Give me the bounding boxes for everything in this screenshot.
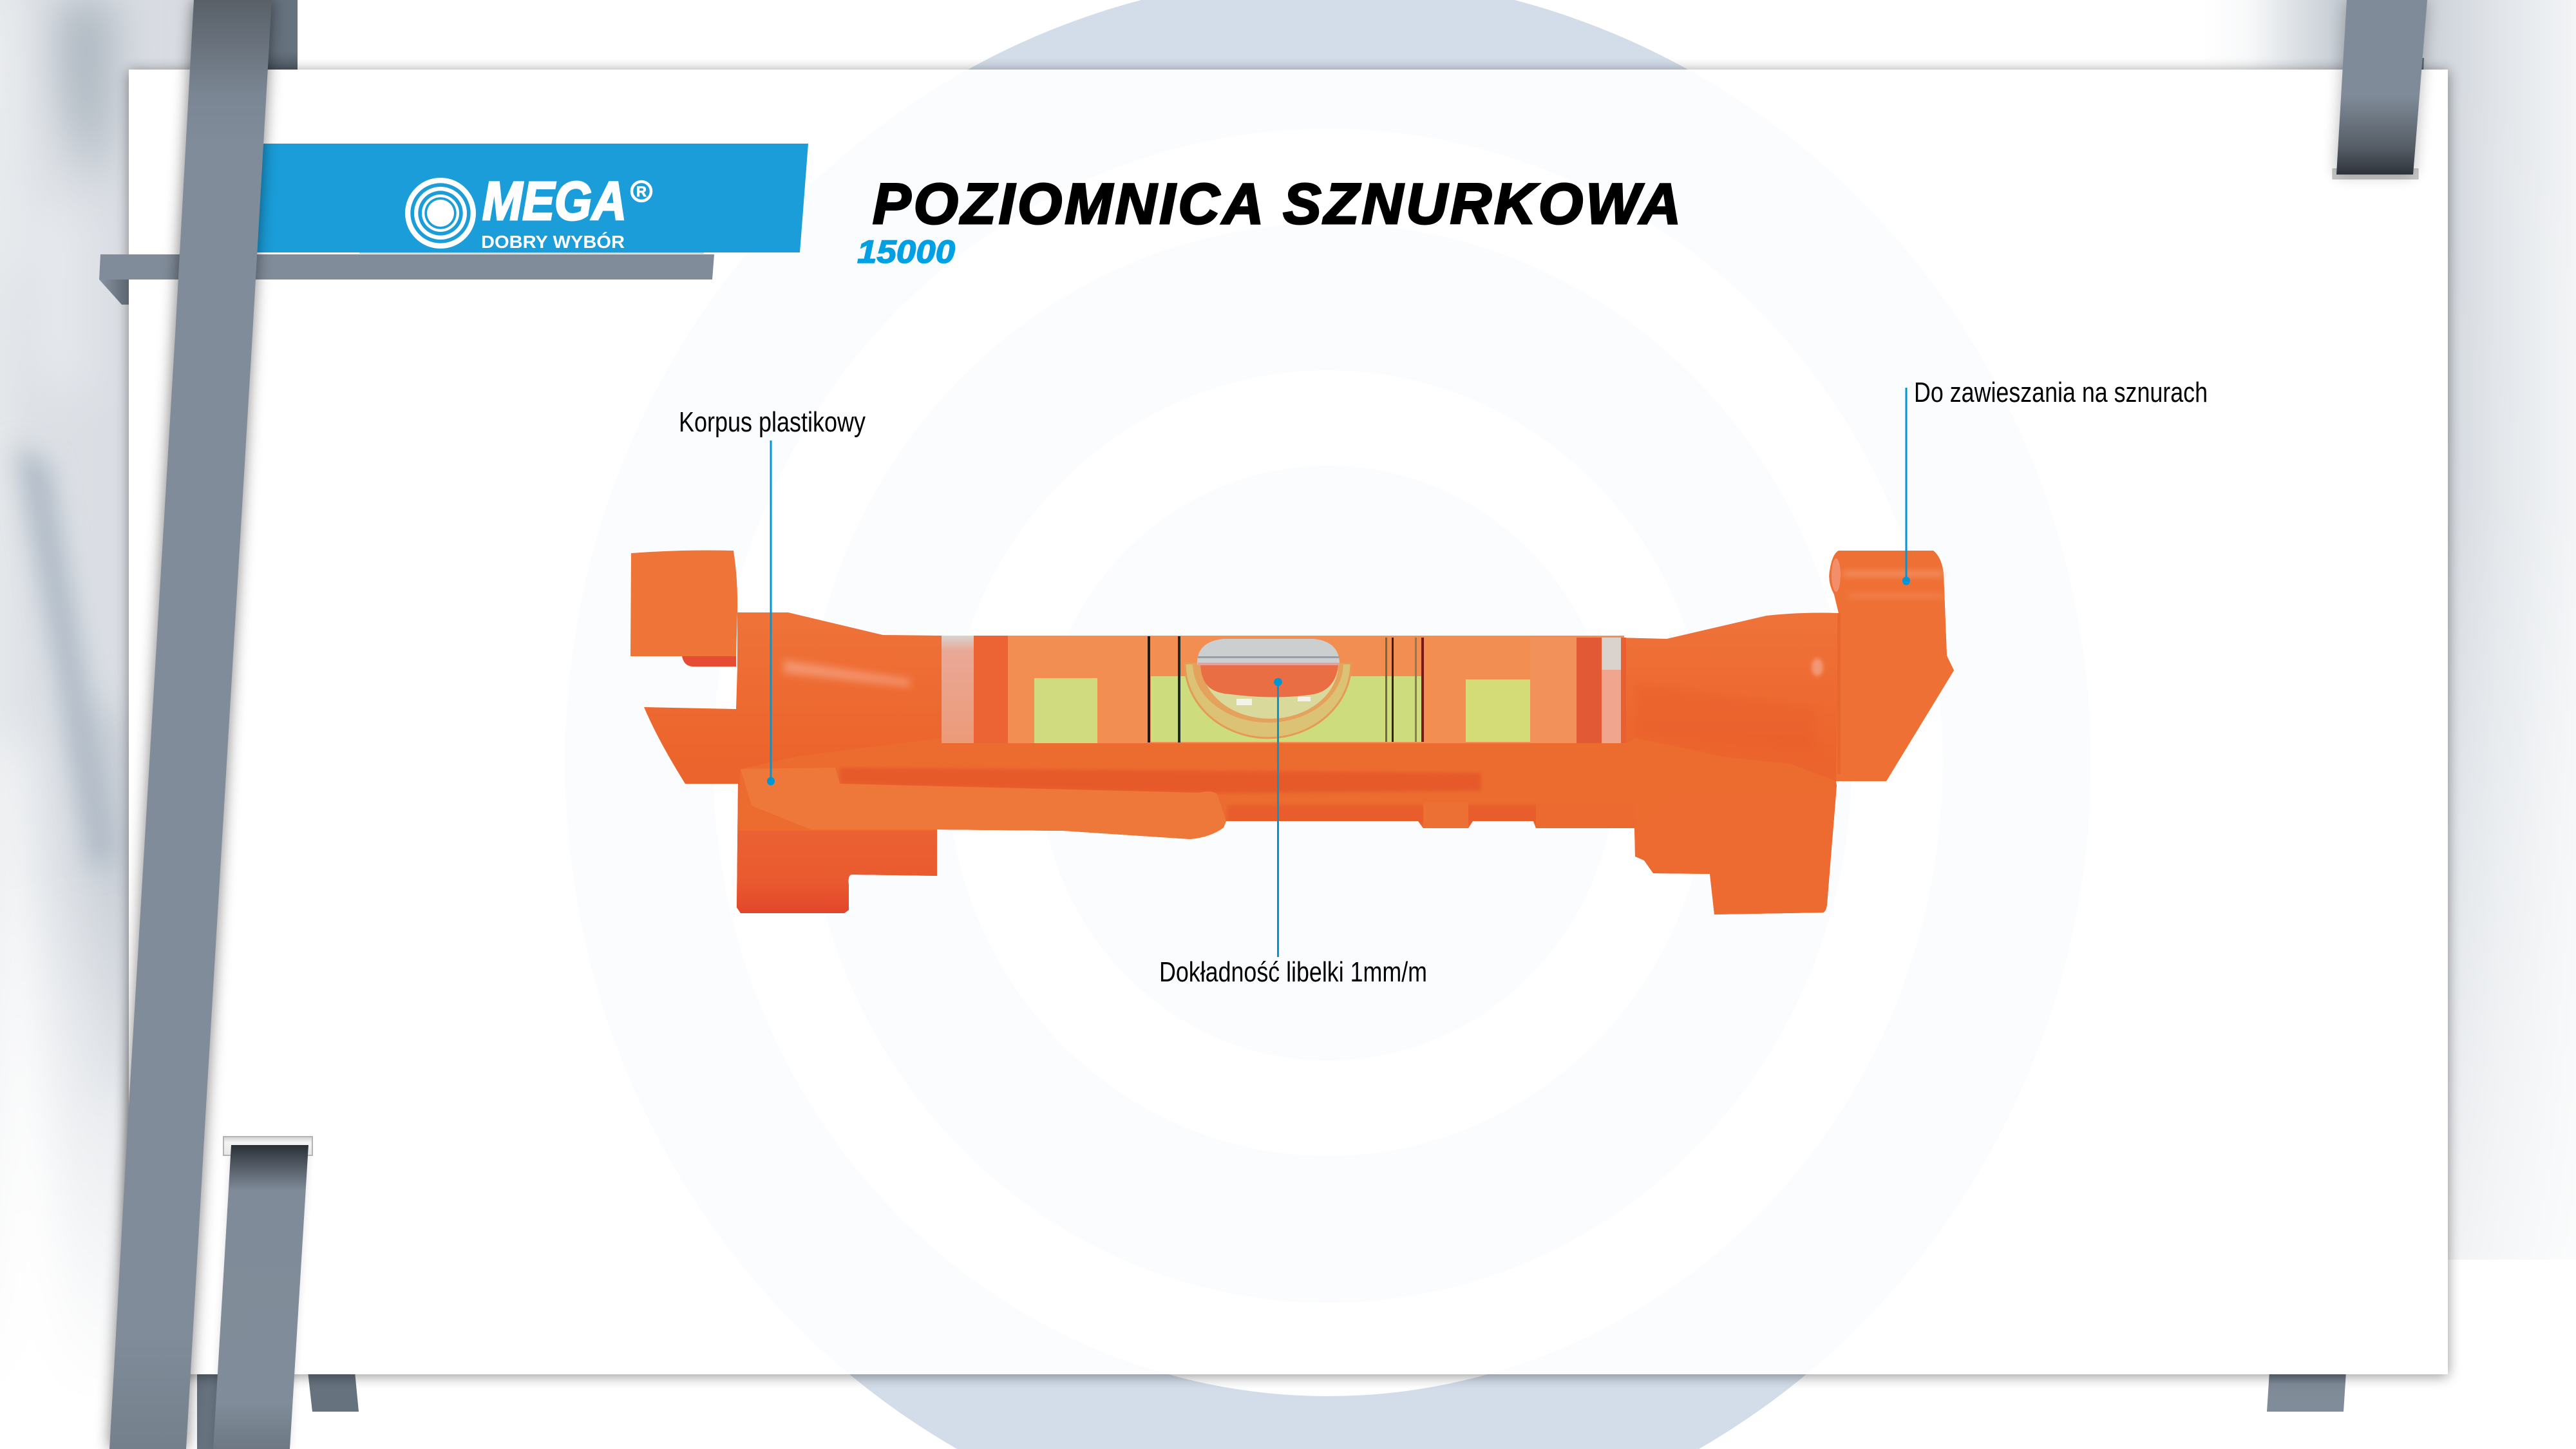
background: right curtain (2249, 0, 2576, 1260)
level: green fluid blocks (1034, 676, 1530, 743)
callout: Do zawieszania na sznurach: Do zawieszania na sznurach (1914, 377, 2208, 408)
top-right strap with clip (2333, 0, 2427, 179)
level: left foot shading (737, 784, 937, 913)
title: POZIOMNICA SZNURKOWA (873, 171, 1681, 236)
level: right hook shading (1829, 551, 1954, 781)
level: air bubble (1185, 639, 1351, 738)
logo: tagline: DOBRY WYBÓR (481, 232, 625, 252)
logo: registered mark (632, 182, 651, 201)
level: clip lever (741, 768, 1226, 839)
orange string level illustration (630, 550, 1954, 914)
level: glass vial (942, 636, 1626, 743)
callout: Do zawieszania na sznurach (1902, 377, 2208, 585)
level: neck highlights (784, 658, 1823, 753)
logo banner (256, 144, 808, 254)
background: left curtain (0, 0, 194, 1284)
logo: registered mark: R (636, 184, 647, 200)
callout: Korpus plastikowy: Korpus plastikowy (679, 406, 866, 438)
level: graduation lines (1148, 636, 1424, 743)
level: right foot shading (1634, 792, 1835, 914)
logo: concentric rings (405, 178, 476, 249)
level: left cylinder cap (630, 550, 737, 667)
callout: Dokładność libelki 1mm/m: Dokładność libelki 1mm/m (1159, 956, 1427, 988)
level: lower rail (738, 770, 1837, 831)
callout: Korpus plastikowy (679, 406, 866, 786)
logo: MEGA wordmark: MEGA (482, 171, 627, 231)
callout: Dokładność libelki 1mm/m (1159, 678, 1427, 988)
background: large blue target ring (565, 0, 2091, 1449)
level: molded body silhouette (644, 551, 1954, 914)
grey ribbon under the logo banner (99, 254, 714, 305)
product code: 15000 (857, 234, 955, 270)
bottom-left strap with clip (213, 1137, 312, 1449)
main diagonal strap (109, 0, 272, 1449)
